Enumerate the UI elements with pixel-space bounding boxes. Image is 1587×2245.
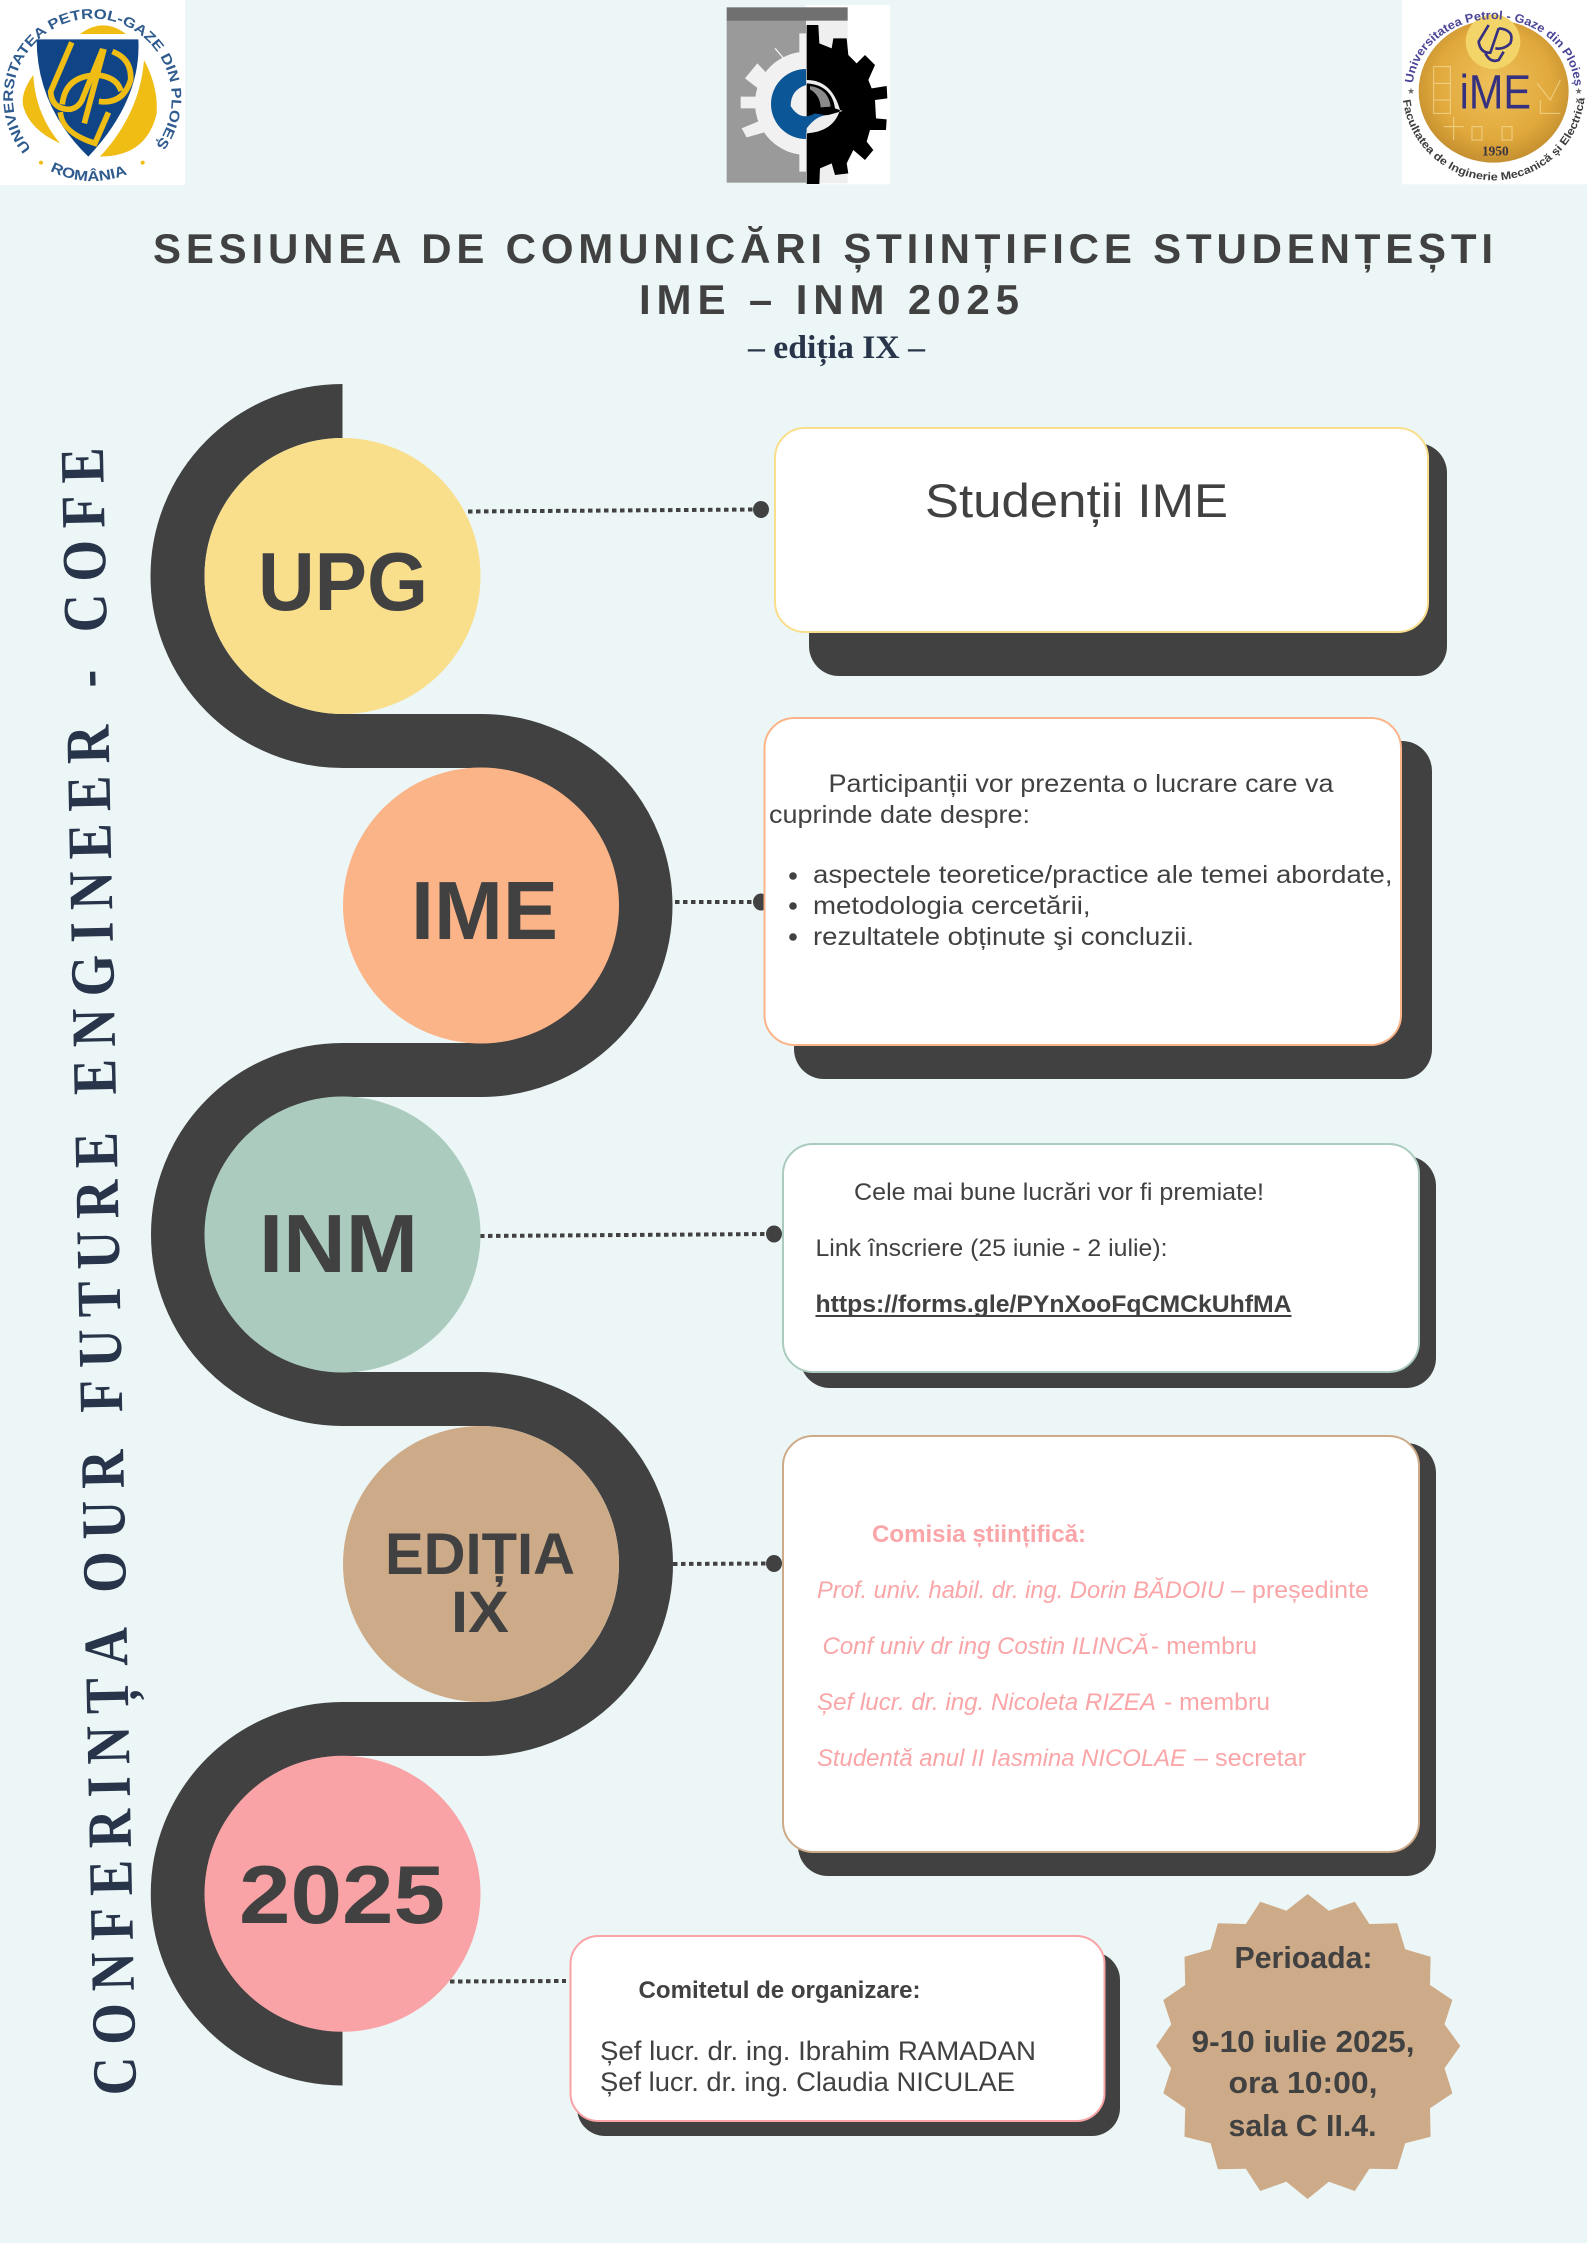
logo: Facultatea IME: iME [1460,66,1531,120]
panel: scientific committee: – secretar [1194,1745,1306,1772]
panel: Studentii IME [775,428,1447,676]
panel: awards and registration link: Link înscriere (25 iunie - 2 iulie): [816,1235,1168,1262]
logo: Facultatea IME: ★ [1575,87,1583,97]
panel: paper requirements: rezultatele obținute şi concluzii. [813,923,1194,951]
panel: organizing committee: Șef lucr. dr. ing. Claudia NICULAE [600,2067,1015,2097]
panel: awards and registration link: Cele mai bune lucrări vor fi premiate! [854,1179,1264,1206]
logo: Facultatea IME: 1950 [1482,143,1509,158]
circle: UPG [204,438,480,714]
circle: Editia IX: IX [451,1580,509,1645]
panel: scientific committee: Șef lucr. dr. ing. Nicoleta RIZEA [817,1689,1156,1716]
logo: Universitatea Petrol-Gaze din Ploiești: ROMÂNIA [50,162,128,182]
circle: INM [204,1096,480,1372]
circle: UPG: UPG [258,535,428,628]
panel: organizing committee: Comitetul de organizare: [638,1977,920,2004]
connector: IME to card [675,894,769,910]
panel: Studentii IME: Studenții IME [925,474,1228,527]
badge: period and venue [1156,1894,1460,2199]
circle: 2025: 2025 [239,1848,445,1941]
panel: scientific committee: - membru [1151,1633,1257,1660]
badge: period and venue: 9-10 iulie 2025, [1192,2024,1414,2059]
panel: paper requirements: Participanții vor prezenta o lucrare care va [828,770,1334,798]
logo: half gear emblem [727,5,890,184]
circle: IME [343,768,619,1044]
panel: scientific committee: – președinte [1231,1577,1369,1604]
badge: period and venue: sala C II.4. [1228,2108,1376,2143]
badge: period and venue: Perioada: [1234,1940,1372,1975]
panel: scientific committee: Studentă anul II Iasmina NICOLAE [817,1745,1187,1772]
panel: scientific committee: Comisia științifică: [872,1521,1086,1548]
circle: Editia IX [343,1426,619,1702]
panel: scientific committee [783,1436,1436,1876]
connector: UPG to card [468,501,769,518]
vertical side heading: CONFERINȚA OUR FUTURE ENGINEER - COFE [47,447,153,2096]
logo: Facultatea IME: Facultatea de Inginerie Mecanică și Electrică [1403,98,1585,180]
circle: INM: INM [259,1197,418,1290]
connector: Editia IX to card [673,1555,782,1572]
panel: awards and registration link: https://forms.gle/PYnXooFqCMCkUhfMA [816,1291,1292,1318]
panel: paper requirements: aspectele teoretice/practice ale temei abordate, [813,861,1392,889]
panel: awards and registration link [783,1144,1436,1388]
panel: organizing committee [570,1936,1120,2136]
title: SESIUNEA DE COMUNICĂRI ȘTIINȚIFICE STUDENȚEȘTI [153,225,1493,273]
panel: paper requirements: cuprinde date despre: [769,801,1030,829]
panel: scientific committee: Prof. univ. habil. dr. ing. Dorin BĂDOIU [817,1577,1225,1604]
serpentine timeline path [177,411,646,2058]
connector: 2025 to card [450,1979,566,1984]
title: IME – INM 2025 [639,276,1019,323]
circle: 2025 [204,1756,480,2032]
panel: paper requirements: metodologia cercetării, [813,892,1090,920]
circle: Editia IX: EDIȚIA [385,1522,575,1587]
connector: INM to card [480,1226,782,1242]
logo: Facultatea IME [1402,0,1587,184]
panel: scientific committee: Conf univ dr ing Costin ILINCĂ [822,1633,1149,1660]
panel: scientific committee: - membru [1164,1689,1270,1716]
badge: period and venue: ora 10:00, [1228,2065,1378,2100]
panel: paper requirements [764,718,1432,1079]
logo: Facultatea IME: ★ [1407,87,1415,97]
title [153,225,1493,367]
title: – ediția IX – [747,330,926,367]
circle: IME: IME [411,864,558,957]
panel: organizing committee: Șef lucr. dr. ing. Ibrahim RAMADAN [600,2036,1036,2066]
